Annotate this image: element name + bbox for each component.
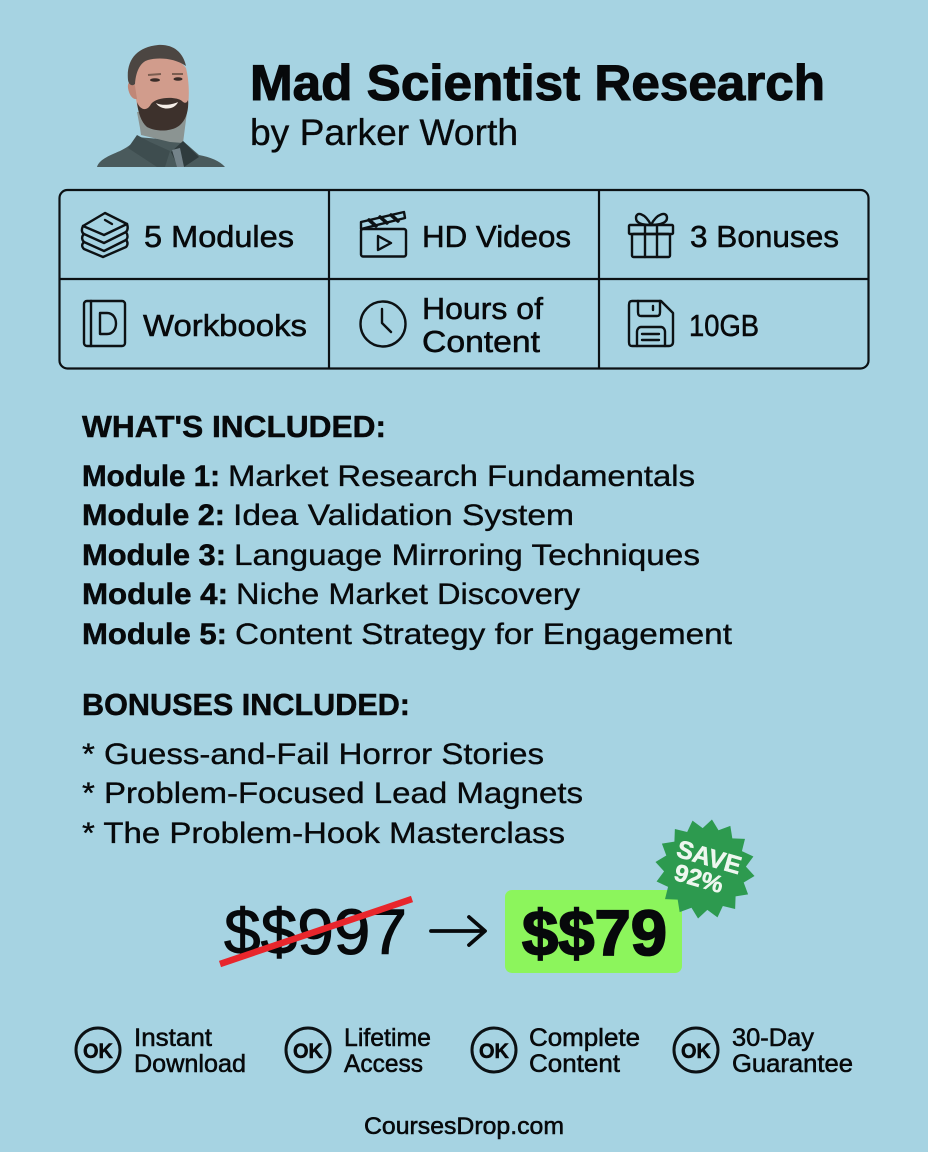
guarantee: complete content: Complete xyxy=(529,1024,640,1052)
label: 5 Modules: 5 Modules xyxy=(144,219,294,254)
title: Mad Scientist Research xyxy=(250,55,825,111)
bonus list: * Guess-and-Fail Horror Stories xyxy=(82,738,544,771)
guarantee: 30-day guarantee xyxy=(674,1024,853,1078)
bonus list xyxy=(82,738,583,850)
panel: course features grid xyxy=(59,190,869,368)
label: Hours of Content: Hours of xyxy=(422,291,543,326)
label: Workbooks: Workbooks xyxy=(143,308,307,343)
guarantee: lifetime access: OK xyxy=(293,1040,323,1063)
module list: Module 5: xyxy=(82,618,227,651)
subtitle: by Parker Worth xyxy=(250,112,518,153)
icon: clapperboard video xyxy=(361,212,406,256)
module list: Idea Validation System xyxy=(233,499,574,532)
guarantee: instant download: Instant xyxy=(134,1024,212,1052)
module list: Module 1: xyxy=(82,460,220,493)
guarantee: complete content: Content xyxy=(529,1050,620,1078)
label: HD Videos: HD Videos xyxy=(422,219,571,254)
footer site name: CoursesDrop.com xyxy=(364,1113,564,1140)
guarantee: complete content: OK xyxy=(479,1040,509,1063)
guarantee: lifetime access: Lifetime xyxy=(344,1024,431,1052)
label: 10GB: 10GB xyxy=(689,308,759,343)
label: 3 Bonuses: 3 Bonuses xyxy=(690,219,839,254)
guarantee: instant download: Download xyxy=(134,1050,246,1078)
guarantee: lifetime access: Access xyxy=(344,1050,423,1078)
module list xyxy=(82,460,733,651)
icon: floppy disk xyxy=(629,301,673,346)
module list: Niche Market Discovery xyxy=(236,578,580,611)
icon: gift box xyxy=(629,214,673,257)
guarantee: complete content xyxy=(472,1024,640,1078)
guarantee: 30-day guarantee: Guarantee xyxy=(732,1050,853,1078)
icon: workbook xyxy=(84,301,125,346)
module list: Module 2: xyxy=(82,499,225,532)
icon: stacked books xyxy=(82,213,128,257)
guarantee: 30-day guarantee: OK xyxy=(681,1040,711,1063)
module list: Market Research Fundamentals xyxy=(228,460,695,493)
new price highlight: $$79 xyxy=(522,897,667,969)
heading: what's included: WHAT'S INCLUDED: xyxy=(82,409,386,444)
bonus list: * Problem-Focused Lead Magnets xyxy=(82,777,583,810)
guarantee: 30-day guarantee: 30-Day xyxy=(732,1024,815,1052)
old price crossed out: $$997 xyxy=(224,896,407,968)
arrow xyxy=(431,917,485,945)
label: Hours of Content: Content xyxy=(422,324,540,359)
guarantee: instant download xyxy=(76,1024,246,1078)
icon: clock xyxy=(360,302,406,346)
new price highlight xyxy=(505,890,682,973)
badge: save 92%: SAVE xyxy=(673,835,745,880)
module list: Module 4: xyxy=(82,578,228,611)
module list: Language Mirroring Techniques xyxy=(234,539,700,572)
module list: Content Strategy for Engagement xyxy=(235,618,733,651)
guarantee: lifetime access xyxy=(286,1024,431,1078)
badge: save 92%: 92% xyxy=(671,859,726,899)
portrait of Parker Worth xyxy=(97,45,225,167)
badge: save 92% xyxy=(649,813,761,925)
bonus list: * The Problem-Hook Masterclass xyxy=(82,817,565,850)
guarantee: instant download: OK xyxy=(83,1040,113,1063)
module list: Module 3: xyxy=(82,539,226,572)
label: Hours of Content xyxy=(422,291,543,359)
heading: bonuses included: BONUSES INCLUDED: xyxy=(82,687,410,722)
